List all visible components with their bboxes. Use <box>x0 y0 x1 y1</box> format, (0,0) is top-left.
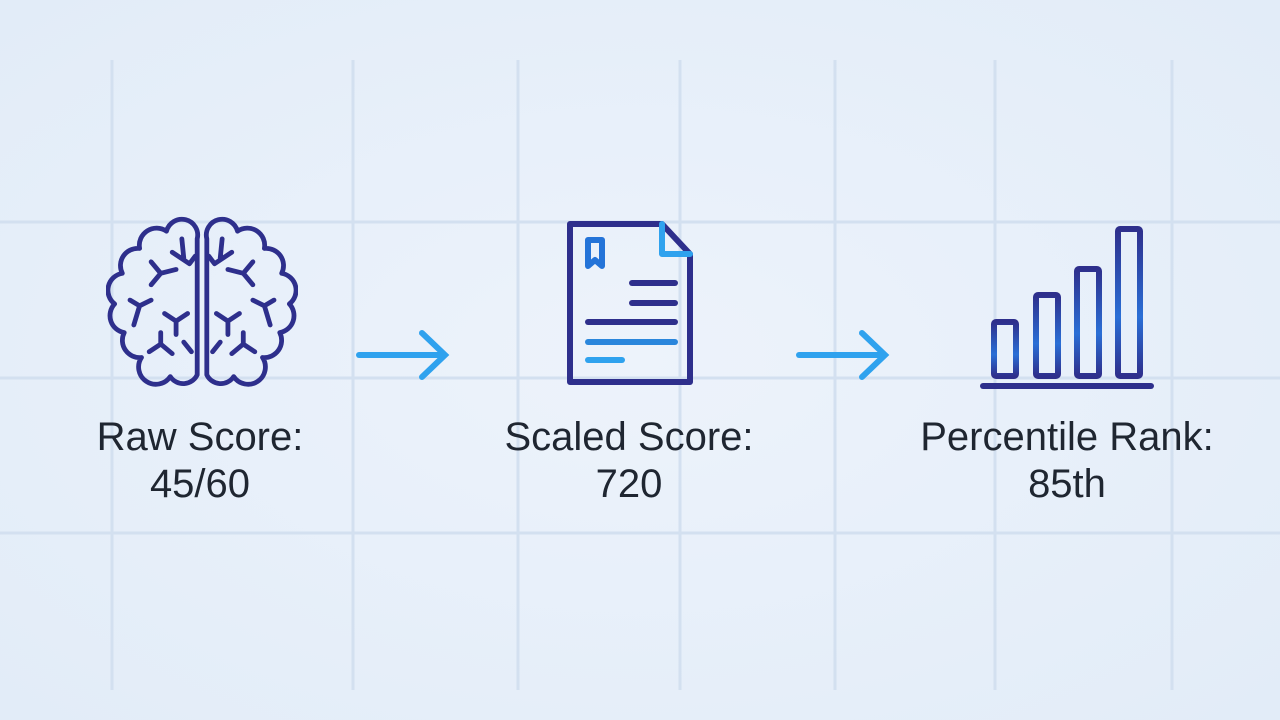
label: percentile rank: Percentile Rank: <box>920 415 1214 459</box>
icon: bar chart <box>980 226 1154 389</box>
label: raw score: 45/60 <box>150 462 250 506</box>
label: scaled score: Scaled Score: <box>504 415 754 459</box>
label: percentile rank: 85th <box>1028 462 1106 506</box>
icon: document <box>567 221 693 385</box>
label: scaled score <box>504 415 754 506</box>
label: raw score <box>97 415 303 506</box>
arrow 2 <box>796 330 890 380</box>
label: raw score: Raw Score: <box>97 415 303 459</box>
label: scaled score: 720 <box>596 462 662 506</box>
arrow 1 <box>356 330 450 380</box>
icon: brain <box>106 216 298 387</box>
label: percentile rank <box>920 415 1214 506</box>
